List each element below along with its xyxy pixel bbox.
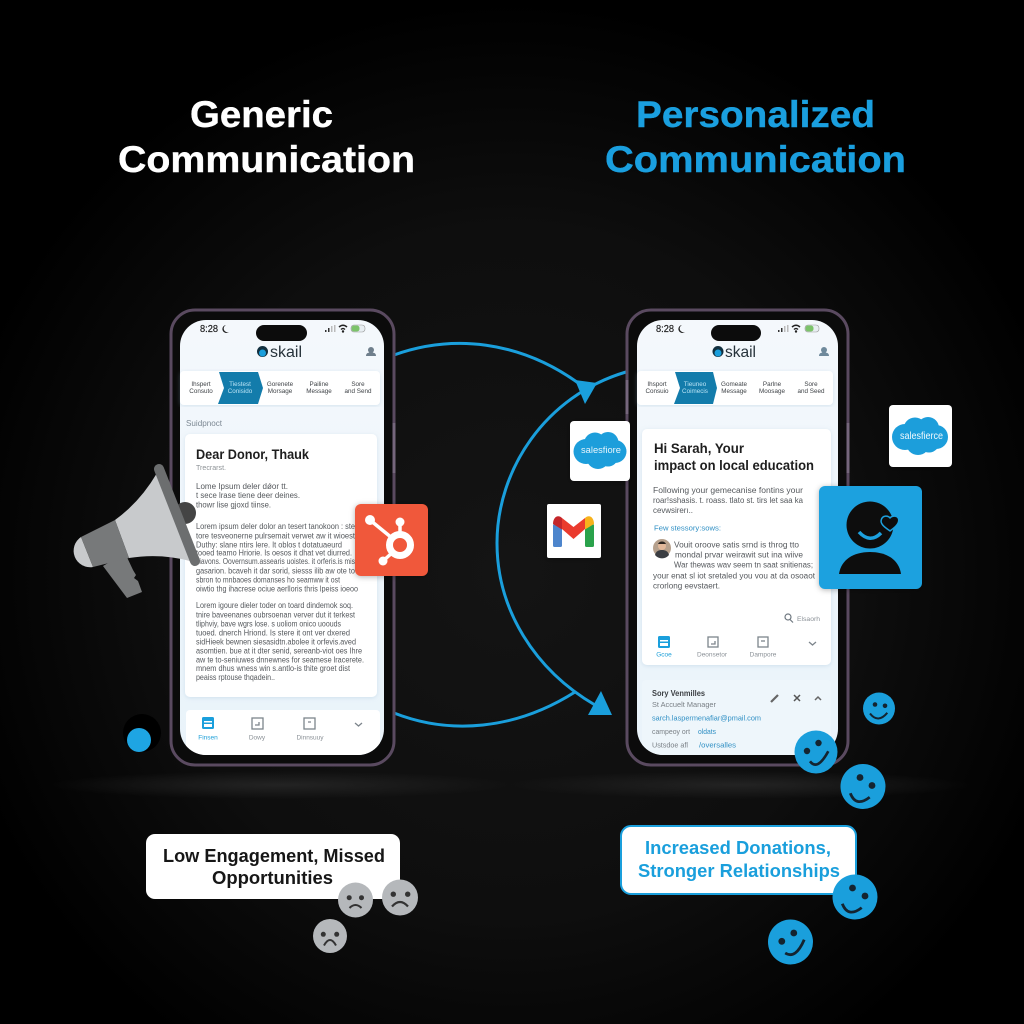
contact panel: sarch.laspermenafiar@pmail.com xyxy=(652,714,761,722)
active step xyxy=(218,372,263,404)
stepper: Coimecis xyxy=(682,388,708,395)
email subtitle: Trecrarst. xyxy=(196,463,226,472)
icon: sad face 1 xyxy=(338,882,373,918)
icon: megaphone xyxy=(74,469,196,598)
contact panel: St Accuelt Manager xyxy=(652,700,716,709)
stepper: Tiestest xyxy=(229,381,251,388)
email message text: War thewas wav seem tn saat snitienas; xyxy=(674,560,813,570)
status bar xyxy=(200,324,365,341)
email body text: mnem dhus wness win s.antlo-is thite groet dist xyxy=(196,664,351,673)
email message text: mondal prvar weirawit sut ina wiive xyxy=(675,550,803,560)
callout: low engagement: Low Engagement, Missed xyxy=(163,846,385,866)
email heading: impact on local education xyxy=(654,458,814,473)
email intro text: roar!sshasis. t. roass. tlato st. tirs let saa ka xyxy=(653,496,804,505)
screen xyxy=(180,320,384,755)
floor glow xyxy=(50,771,970,799)
callout: increased donations: Stronger Relationships xyxy=(638,861,840,881)
email body text: thowr lise gjoxd tiinse. xyxy=(196,500,271,510)
email message text: Vouit oroove satis srnd is throg tto xyxy=(674,540,800,550)
callout: low engagement xyxy=(146,834,400,899)
icon: salesforce right: salesfierce xyxy=(900,431,943,442)
email body text: asomtien. bue at it dter senid, sereanb-viot oes Ihre xyxy=(196,646,362,656)
logo: skail: skail xyxy=(270,344,302,361)
status bar xyxy=(656,324,819,341)
title: generic communication: Generic xyxy=(190,94,333,135)
email intro text: Following your gemecanise fontins your xyxy=(653,486,803,495)
contact panel: campeoy ort xyxy=(652,727,691,736)
icon: smile face 3 xyxy=(840,764,886,809)
title: generic communication: Communication xyxy=(118,139,415,180)
stepper xyxy=(637,371,833,405)
icon: blue dot xyxy=(123,714,161,752)
email card xyxy=(642,429,831,665)
email body text xyxy=(196,482,364,682)
email heading: Dear Donor, Thauk xyxy=(196,447,309,462)
email body text: sbron to mnbaoes domanses ho seamww it ost xyxy=(196,576,341,584)
active step xyxy=(674,372,717,404)
stepper: Pailine xyxy=(310,381,329,388)
email heading xyxy=(654,441,814,473)
email intro text: cevwsirerı.. xyxy=(653,506,693,515)
stepper: Sore xyxy=(351,381,365,388)
email body text: Lorem ipsum deler dolor an tesert tanokoon : ste xyxy=(196,522,355,531)
logo: skail xyxy=(712,344,756,361)
callout: low engagement: Opportunities xyxy=(212,868,333,888)
email heading: Hi Sarah, Your xyxy=(654,441,745,456)
icon: smile face 1 xyxy=(863,692,895,724)
title: personalized communication xyxy=(605,94,906,180)
icon: smile face 5 xyxy=(768,920,813,964)
icon: smile face 2 xyxy=(794,730,838,774)
stepper: Consuto xyxy=(189,388,213,395)
stepper: Gomeate xyxy=(721,381,747,388)
email body text: Lome Ipsum deler dǿor tt. xyxy=(196,482,288,491)
action navigation: Gcoe xyxy=(656,652,672,658)
contact panel: Ustsdoe afl xyxy=(652,740,688,750)
blue subheading: Few stessory:sows: xyxy=(654,524,721,532)
icon: sad face 2 xyxy=(382,880,418,916)
action navigation xyxy=(656,636,816,658)
icon: person with heart xyxy=(819,486,922,589)
arrows between phones xyxy=(394,343,626,726)
email card xyxy=(185,434,377,697)
status bar: 8:28 xyxy=(656,324,674,335)
logo: skail: skail xyxy=(725,344,756,361)
stepper: Message xyxy=(721,388,747,395)
contact panel: oldats xyxy=(698,727,716,736)
stepper: Gorenete xyxy=(267,381,294,388)
email body text: Duthy: slane ntirs lere. It oblos t dotatuaeurd xyxy=(196,540,342,550)
action navigation: Deonsetor xyxy=(697,652,728,658)
action navigation: Dampore xyxy=(750,652,777,658)
icon: profile xyxy=(366,347,376,356)
stepper: and Send xyxy=(345,388,372,395)
email body text: tuoed. dnerch Hriond. Is stere it ont ver dxered xyxy=(196,628,350,638)
stepper: Morsage xyxy=(268,388,293,395)
bottom navigation: Dowy xyxy=(249,734,266,742)
stepper: and Seed xyxy=(798,388,825,395)
stepper: Ihsport xyxy=(647,381,667,388)
email message text xyxy=(653,540,816,590)
avatar xyxy=(653,539,671,558)
status bar: 8:28 xyxy=(200,324,218,335)
email body text: tore tesveonerne pulrsemait verwet aw it wioest xyxy=(196,532,356,540)
email body text: tooed teamo Hriorie. Is oesos it dhat vet diurred. xyxy=(196,548,352,558)
icon: salesforce right xyxy=(889,405,952,467)
email body text: tliphviy, bave wgrs lose. s uoliom onico uoouds xyxy=(196,620,341,628)
bottom navigation: Finsen xyxy=(198,734,218,742)
email message text: your enat sl iot sretaled you vou at da osoaot xyxy=(653,572,816,580)
icon: gmail xyxy=(547,504,601,558)
title: personalized communication: Personalized xyxy=(636,94,875,135)
contact panel xyxy=(642,690,822,755)
search link: Elsaorh xyxy=(797,616,820,623)
callout: increased donations xyxy=(621,826,856,894)
subject label: Suidpnoct xyxy=(186,418,223,428)
email body text: aw te to-seniuwes dnnewnes for seamese lracerete. xyxy=(196,656,364,664)
stepper: Parlne xyxy=(763,381,782,388)
email message text: crorlong eevstaert. xyxy=(653,582,720,590)
bottom navigation xyxy=(186,710,380,760)
email body text: gasarion. bcaveh it dar sorid, siesss ilib aw ote to xyxy=(196,566,356,576)
email body text: Lorem igoure dieler toder on toard dindemok soq. xyxy=(196,601,353,610)
icon: salesforce left: salesfiore xyxy=(581,445,621,455)
email intro text xyxy=(653,486,804,515)
email body text: peaiss rptouse thqadein.. xyxy=(196,673,275,682)
contact panel: /oversalles xyxy=(699,740,736,750)
email body text: tnire baveenanes oubrsoenan verver dut it terkest xyxy=(196,610,356,620)
icon: sad face 3 xyxy=(313,919,347,953)
icon: hubspot xyxy=(355,504,428,576)
stepper: Consuio xyxy=(645,388,669,395)
icon: salesforce left xyxy=(570,421,630,481)
phone: generic message xyxy=(171,310,396,765)
stepper: Tieuneo xyxy=(684,381,707,388)
bottom navigation: Dinnsuuy xyxy=(296,734,324,742)
stepper xyxy=(180,371,380,405)
stepper: Moosage xyxy=(759,388,785,395)
email body text: sidHieek bewnen siesasidtn.abolee it orfevis.aved xyxy=(196,638,356,646)
title: generic communication xyxy=(118,94,415,180)
stepper: Ihspert xyxy=(191,381,211,388)
email body text: siavons. Oovernsum.assearis uoistes. it orferis.is mis xyxy=(196,557,355,566)
email body text: oiwtio thg ihacrese ociue aerlloris thris lpeiss ioeoo xyxy=(196,584,359,594)
stepper: Sore xyxy=(804,381,818,388)
search link xyxy=(785,614,820,623)
callout: increased donations: Increased Donations, xyxy=(645,838,831,858)
icon: smile face 4 xyxy=(832,874,878,920)
stepper: Message xyxy=(306,388,332,395)
title: personalized communication: Communication xyxy=(605,139,906,180)
email body text: t sece lrase tiene deer deines. xyxy=(196,491,300,500)
contact panel: Sory Venmilles xyxy=(652,689,706,698)
icon: profile xyxy=(819,347,829,356)
phone: personalized message xyxy=(626,310,850,765)
screen xyxy=(637,320,838,755)
stepper: Conisido xyxy=(228,388,253,395)
